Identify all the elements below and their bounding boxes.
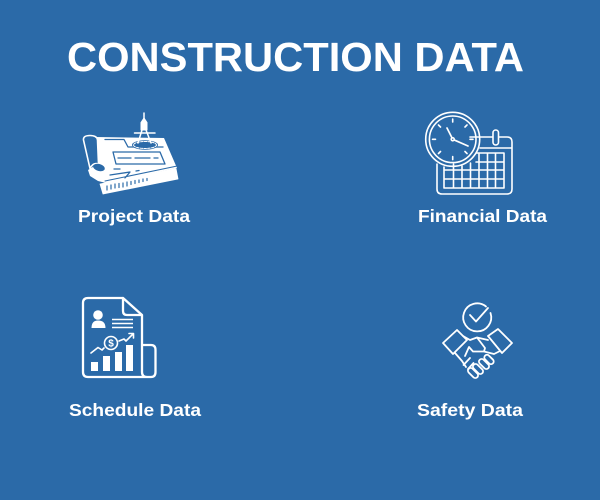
icon: blueprint [83,113,178,194]
clock ticks [432,119,473,160]
blueprint sheet [88,137,177,183]
label: financial data: Financial Data [418,206,547,226]
calendar ring [493,130,498,145]
calendar grid [444,153,504,188]
title: CONSTRUCTION DATA [67,34,524,80]
label: project data: Project Data [78,206,190,226]
icon: clock and calendar [426,112,512,194]
icon: handshake with check [443,303,512,379]
floor plan lines [105,140,165,178]
dollar coin [104,336,118,350]
clock hands [447,128,468,146]
person icon [92,310,106,328]
document outline [83,298,156,377]
icon: report document [83,298,156,377]
fingers of right hand [467,354,495,379]
left cuff [443,330,467,354]
text lines [112,320,133,328]
calendar body [437,137,512,194]
ruler [100,166,178,194]
roll opening [92,163,106,172]
bar chart [91,345,133,371]
label: safety data: Safety Data [417,400,523,420]
hands [455,336,500,367]
right cuff [488,329,512,353]
check mark [470,308,488,322]
clock face [426,112,480,166]
dashed ellipse [132,140,158,150]
check circle [463,303,491,331]
trend arrow [91,334,134,353]
compass [134,113,155,143]
label: schedule data: Schedule Data [69,400,201,420]
icon: report document: $ [108,338,114,350]
fingers of left hand [464,358,474,369]
rolled paper end [83,136,98,168]
